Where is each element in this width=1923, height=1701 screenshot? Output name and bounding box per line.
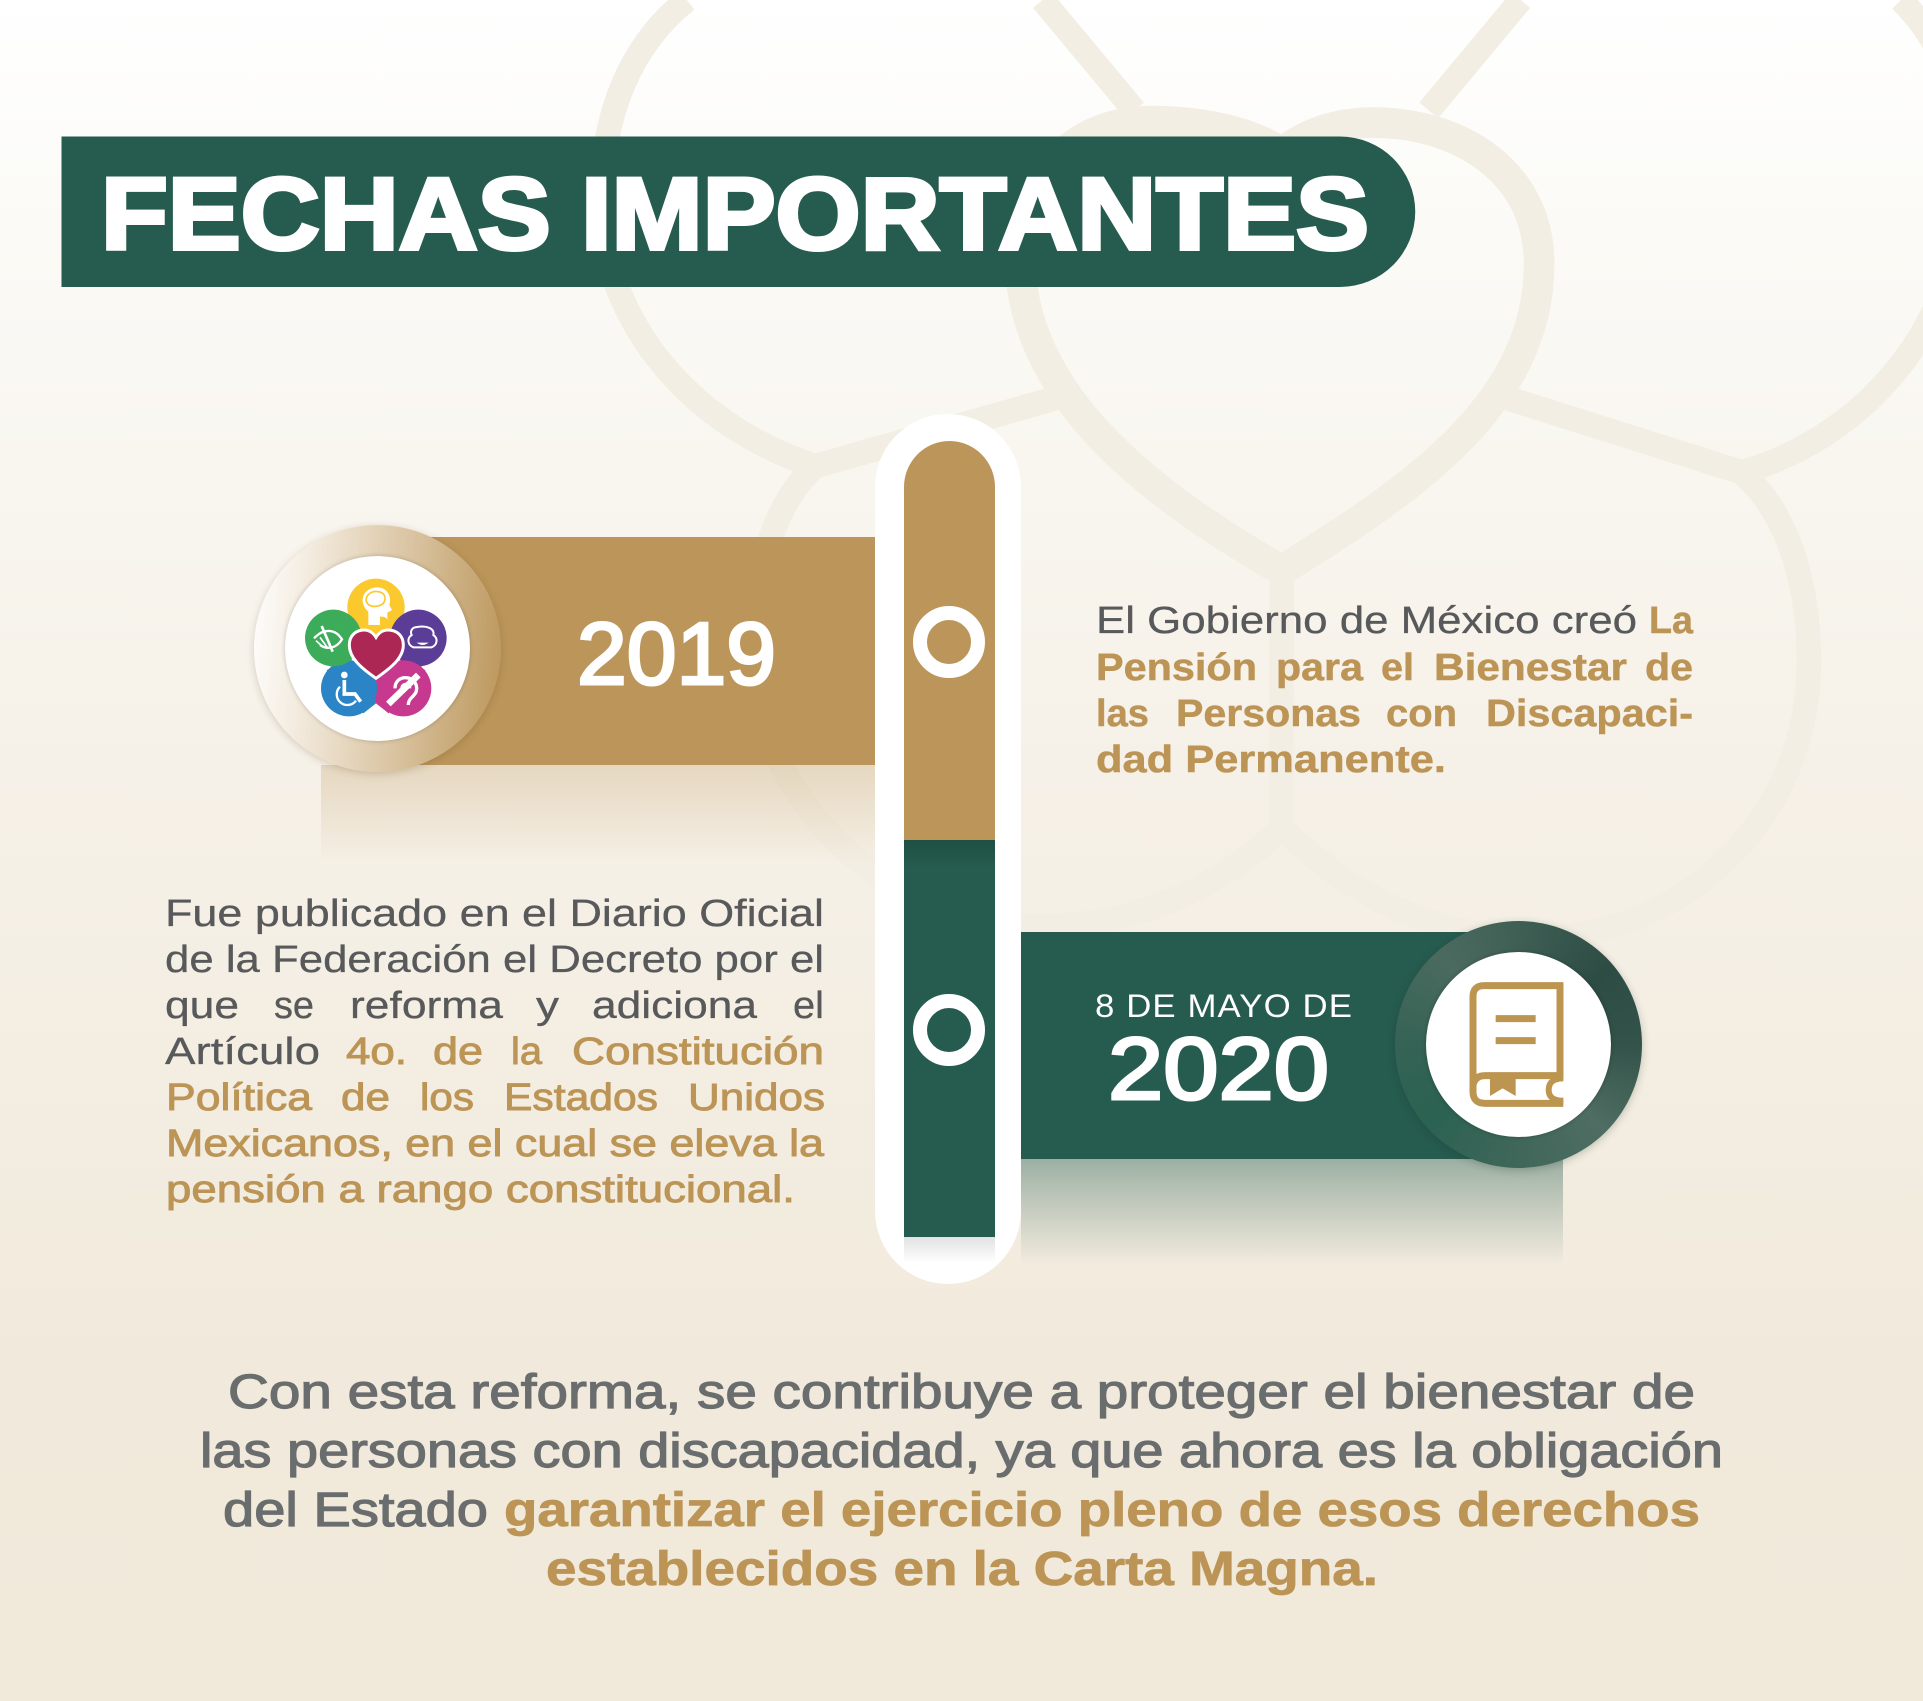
- right text block: 2019 description: Bienestar: [1434, 647, 1627, 689]
- left text block: 2020 description: Artículo: [165, 1031, 320, 1073]
- date label 8 de mayo de 2020: [1095, 988, 1353, 1118]
- 2020 green bar: [1021, 932, 1521, 1159]
- 2019 circle badge ring: [254, 525, 501, 772]
- right text block: 2019 description: para: [1276, 647, 1364, 689]
- 2019 bar shadow: [321, 765, 875, 865]
- ring marker 2020: [920, 1001, 978, 1059]
- right text block: 2019 description: el: [1381, 647, 1414, 689]
- column bottom shadow: [904, 1237, 995, 1263]
- icon: book: [1473, 983, 1563, 1103]
- right text block: 2019 description: las: [1096, 693, 1149, 735]
- left text block: 2020 description: Estados: [504, 1077, 658, 1119]
- left text block: 2020 description: los: [420, 1077, 474, 1119]
- right text block: 2019 description: [1096, 600, 1694, 781]
- banner shape: [62, 136, 1415, 287]
- left text block: 2020 description: adiciona: [592, 985, 758, 1027]
- left text block: 2020 description: Política: [166, 1077, 313, 1119]
- left text block: 2020 description: se: [274, 985, 314, 1027]
- left text block: 2020 description: [165, 893, 825, 1211]
- bottom closing statement: Con esta reforma, se contribuye a proteger el bienestar de: [228, 1366, 1695, 1419]
- petal purple: infant face: [390, 610, 447, 667]
- right text block: 2019 description: de: [1645, 647, 1693, 689]
- right text block: 2019 description: Personas: [1176, 693, 1361, 735]
- year 2020: 2020: [1108, 1019, 1329, 1118]
- left text block: 2020 description: que: [165, 985, 239, 1027]
- petal blue: wheelchair: [321, 660, 377, 716]
- left text block: 2020 description: Mexicanos, en el cual se eleva la: [166, 1123, 825, 1165]
- bottom closing statement: las personas con discapacidad, ya que ahora es la obligación: [200, 1425, 1723, 1478]
- year 2019 label: 2019: [577, 604, 776, 703]
- left text block: 2020 description: Unidos: [688, 1077, 825, 1119]
- left text block: 2020 description: pensión a rango constitucional.: [166, 1169, 795, 1211]
- column gold segment: [904, 441, 995, 840]
- right text block: 2019 description: dad Permanente.: [1096, 739, 1446, 781]
- ring marker 2019: [920, 613, 978, 671]
- petal green: visual: [305, 610, 362, 667]
- petal magenta: hearing: [375, 660, 431, 716]
- left text block: 2020 description: Constitución: [572, 1031, 824, 1073]
- right text block: 2019 description: Discapaci-: [1486, 693, 1693, 735]
- right text block: 2019 description: con: [1386, 693, 1457, 735]
- date line: 8 DE MAYO DE: [1095, 988, 1353, 1024]
- left text block: 2020 description: de: [341, 1077, 390, 1119]
- bottom closing statement: garantizar el ejercicio pleno de esos derechos: [504, 1484, 1700, 1537]
- left text block: 2020 description: y: [536, 985, 559, 1027]
- left text block: 2020 description: de la Federación el Decreto por el: [165, 939, 824, 981]
- left text block: 2020 description: 4o.: [346, 1031, 407, 1073]
- left text block: 2020 description: la: [511, 1031, 543, 1073]
- timeline column: [875, 414, 1021, 1284]
- right text block: 2019 description: El Gobierno de México creó: [1096, 600, 1637, 642]
- right text block: 2019 description: La: [1649, 600, 1694, 642]
- left text block: 2020 description: reforma: [350, 985, 504, 1027]
- left text block: 2020 description: el: [793, 985, 824, 1027]
- column green segment: [904, 840, 995, 1237]
- title text: FECHAS IMPORTANTES: [101, 157, 1369, 271]
- bottom closing statement: [200, 1366, 1723, 1596]
- 2020 circle badge ring: [1395, 921, 1642, 1168]
- petal yellow: intellectual: [347, 579, 405, 636]
- 2019 gold bar: [400, 537, 875, 765]
- heart: [349, 630, 403, 678]
- icon: disability flower: [305, 579, 447, 716]
- right text block: 2019 description: Pensión: [1096, 647, 1257, 689]
- 2020 bar shadow: [1021, 1159, 1563, 1264]
- title banner: [62, 136, 1415, 287]
- left text block: 2020 description: de: [433, 1031, 483, 1073]
- column white capsule: [875, 414, 1021, 1284]
- left text block: 2020 description: Fue publicado en el Diario Oficial: [165, 893, 824, 935]
- bottom closing statement: del Estado: [223, 1484, 488, 1537]
- bottom closing statement: establecidos en la Carta Magna.: [546, 1543, 1378, 1596]
